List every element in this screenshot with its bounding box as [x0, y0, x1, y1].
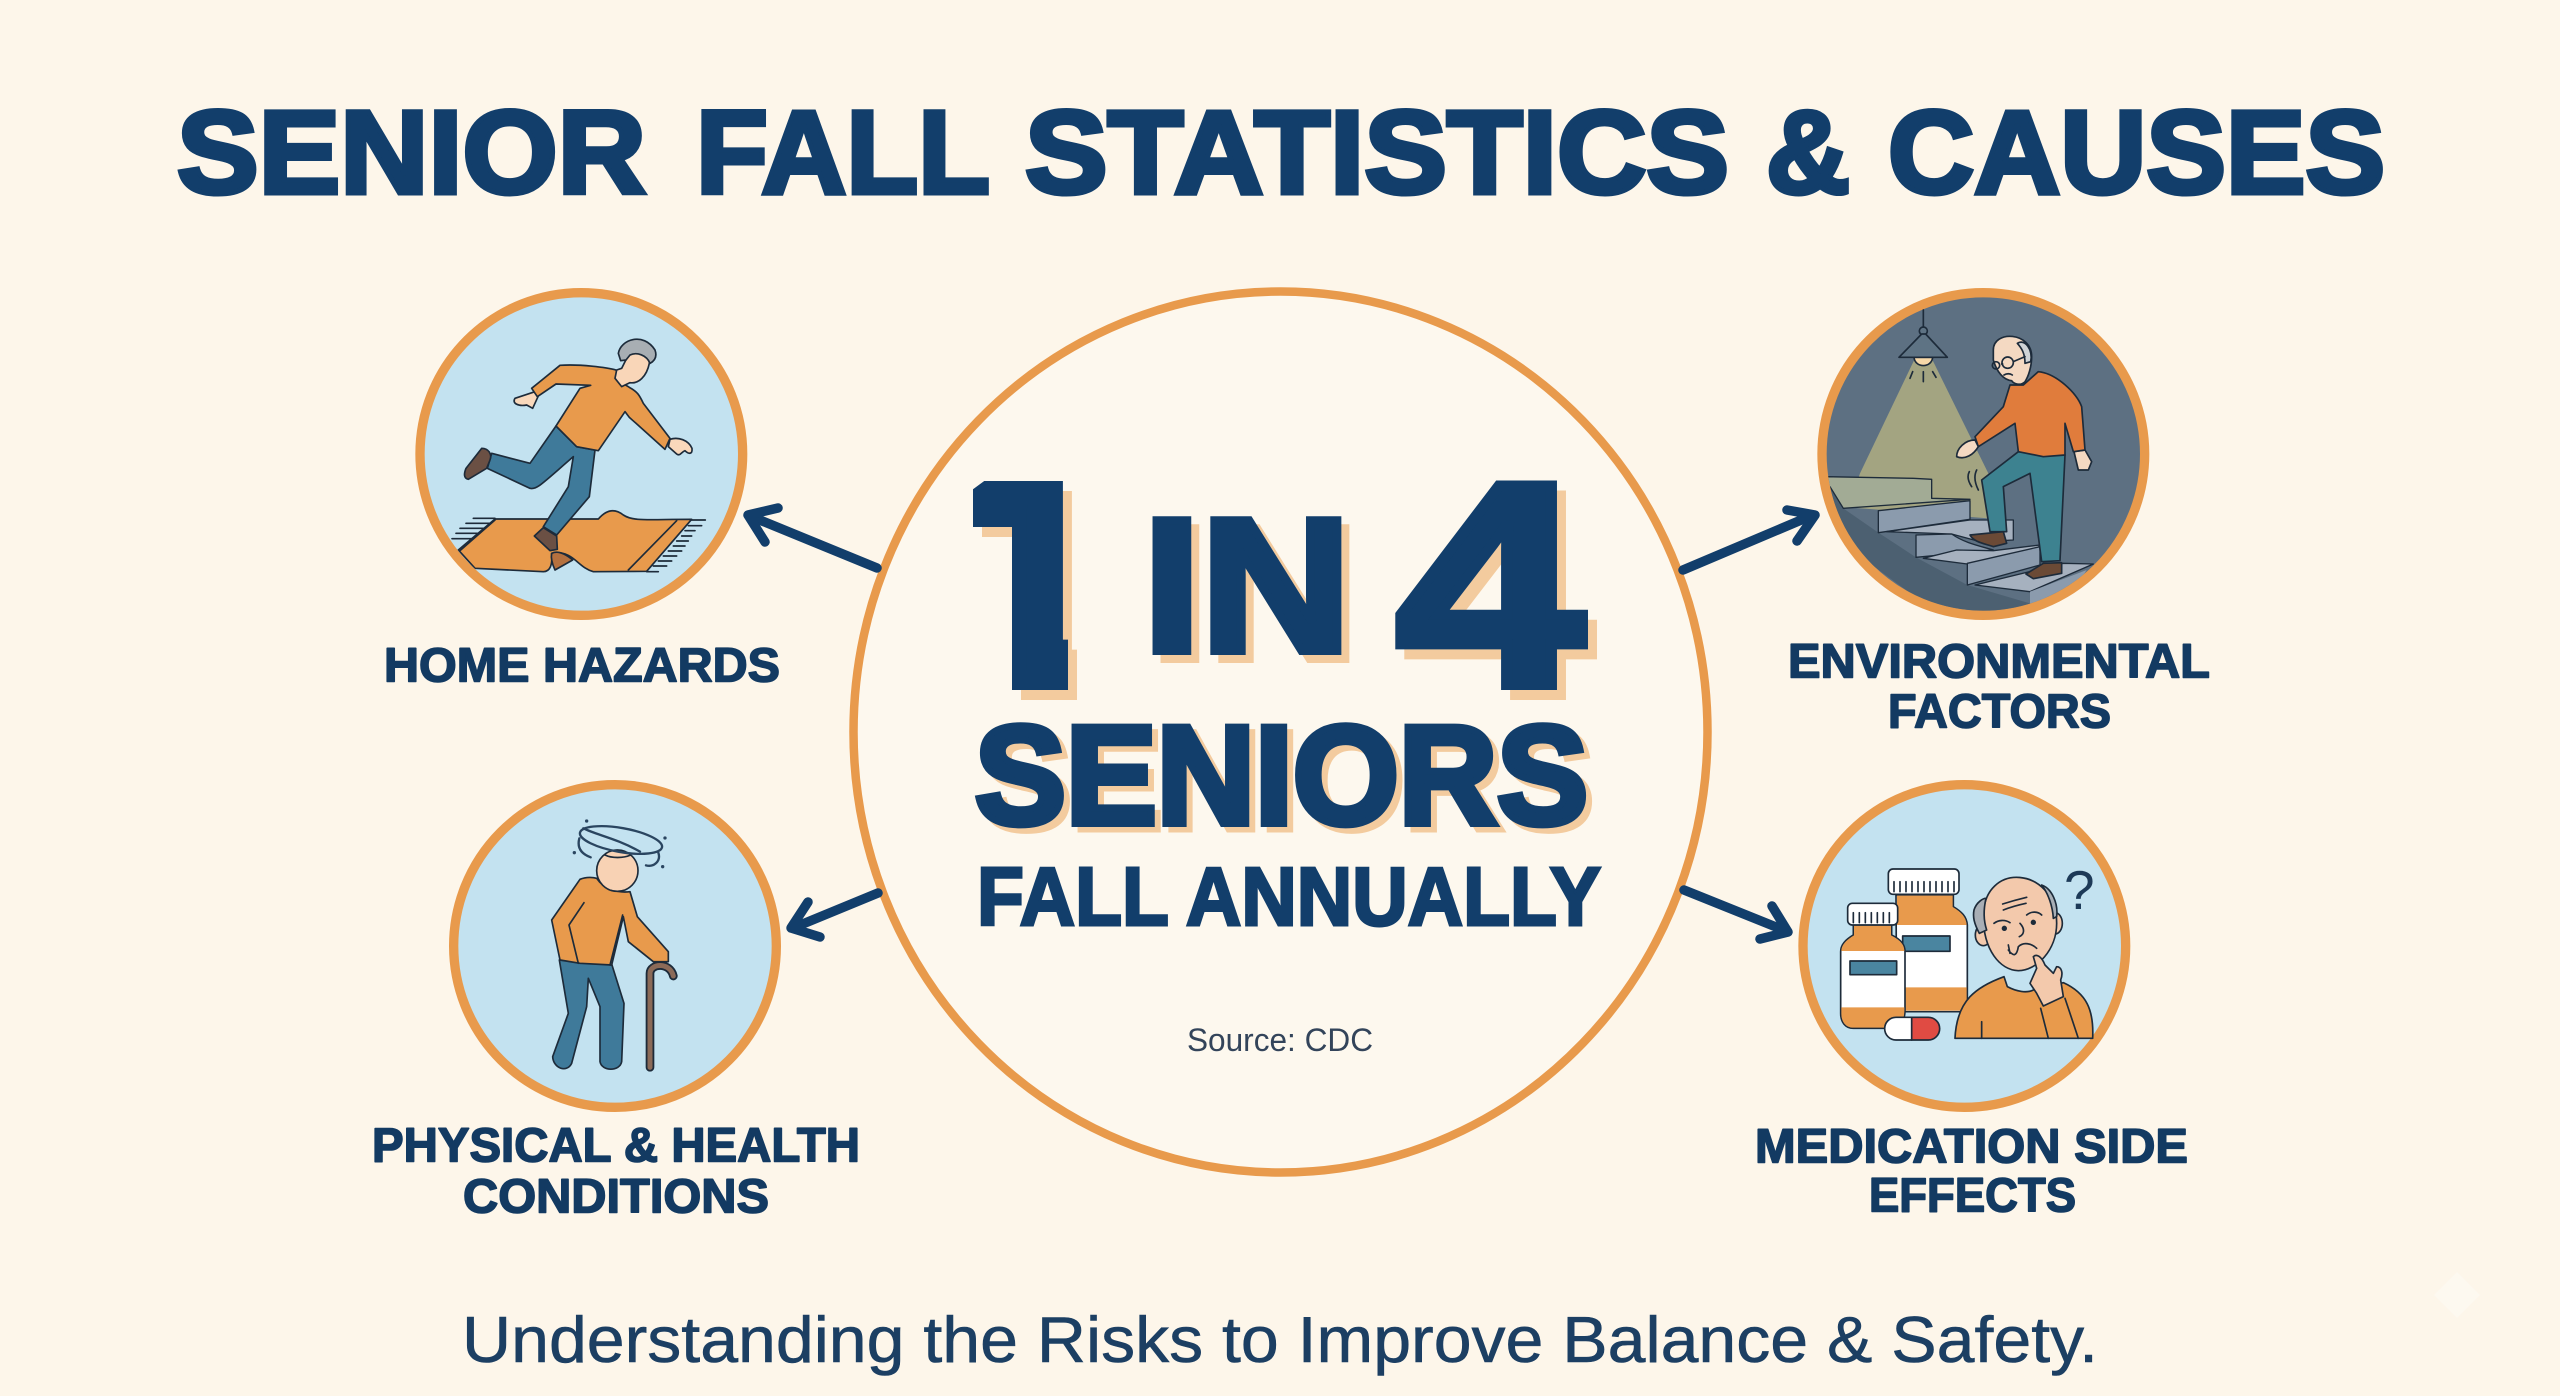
lamp	[1910, 310, 1978, 490]
title	[177, 87, 2385, 219]
headline: 1 in 4: 4	[1396, 423, 1586, 747]
question mark: ?	[2064, 859, 2095, 921]
man's face	[1994, 897, 2042, 955]
source note: Source: CDC	[1187, 1022, 1373, 1058]
head	[597, 850, 638, 891]
under stair shadow	[1830, 487, 2030, 611]
trousers	[1982, 452, 2065, 562]
label: environmental factors: ENVIRONMENTAL	[1788, 636, 2210, 688]
hands	[1957, 440, 1978, 458]
back leg and front leg	[487, 426, 595, 535]
central circle	[854, 292, 1708, 1172]
trousers	[553, 960, 624, 1069]
label: environmental factors: FACTORS	[1888, 686, 2111, 738]
headline: 1 in 4: 4	[1405, 433, 1595, 757]
stairs	[1827, 477, 1970, 508]
label: medication side effects	[1755, 1120, 2188, 1222]
dizzy dots	[573, 819, 667, 868]
panel: physical and health conditions	[372, 785, 860, 1224]
icon: medicine bottles and confused man	[1803, 785, 2126, 1107]
panel: home hazards	[384, 293, 780, 692]
man's ears and hair	[1975, 924, 1991, 946]
arrow: to medication side effects	[1684, 890, 1788, 939]
cane	[650, 966, 673, 1067]
headline: 1 in 4: 1	[948, 421, 1094, 754]
title: STATISTICS	[1025, 87, 1729, 219]
head	[615, 353, 649, 387]
man's head	[1983, 877, 2057, 971]
label: physical and health conditions: PHYSICAL & HEALTH	[372, 1120, 860, 1172]
title: SENIOR	[177, 87, 646, 219]
footer tagline: Understanding the Risks to Improve Balance & Safety.	[462, 1303, 2098, 1376]
shoes	[1970, 532, 2007, 547]
panel: environmental factors	[1788, 293, 2210, 738]
label: home hazards: HOME HAZARDS	[384, 640, 780, 692]
subheading: fall annually: FALL ANNUALLY	[977, 850, 1601, 943]
back bottle	[1896, 895, 1967, 1012]
hands	[514, 392, 538, 408]
label: physical and health conditions: CONDITIONS	[463, 1170, 769, 1224]
label: environmental factors	[1788, 636, 2210, 738]
panel: central statistic	[854, 292, 1708, 1172]
arrow: to home hazards	[748, 508, 877, 568]
title: FALL	[696, 87, 990, 219]
man's shoulders	[1955, 977, 2093, 1038]
front bottle	[1841, 925, 1905, 1028]
headline: 1 in 4	[973, 480, 1597, 700]
icon: person on dim stairs	[1820, 293, 2145, 620]
sweater	[532, 365, 670, 451]
head	[1993, 336, 2032, 384]
hand	[2030, 955, 2063, 1006]
dizzy swirl	[578, 821, 664, 866]
icon: person tripping on rug	[420, 293, 743, 615]
label: physical and health conditions	[372, 1120, 860, 1224]
headline: seniors: SENIORS	[975, 696, 1588, 854]
icon: dizzy person with cane	[454, 785, 776, 1107]
arrow: to environmental factors	[1683, 510, 1815, 570]
title: CAUSES	[1888, 87, 2385, 219]
arrow: to physical and health conditions	[791, 893, 878, 937]
panel: medication side effects	[1755, 785, 2188, 1222]
headline: 1 in 4: IN	[1151, 488, 1359, 700]
label: medication side effects: EFFECTS	[1869, 1170, 2076, 1222]
headline: 1 in 4: IN	[1143, 480, 1351, 692]
capsule	[1885, 1017, 1912, 1040]
title: &	[1766, 87, 1850, 219]
headline: 1 in 4: 1	[957, 431, 1103, 764]
sweater	[1975, 372, 2085, 457]
label: medication side effects: MEDICATION SIDE	[1755, 1120, 2188, 1174]
shoes	[465, 448, 491, 479]
headline: seniors: SENIORS	[981, 702, 1594, 859]
sweater	[552, 877, 668, 965]
light cone	[1848, 358, 1988, 518]
